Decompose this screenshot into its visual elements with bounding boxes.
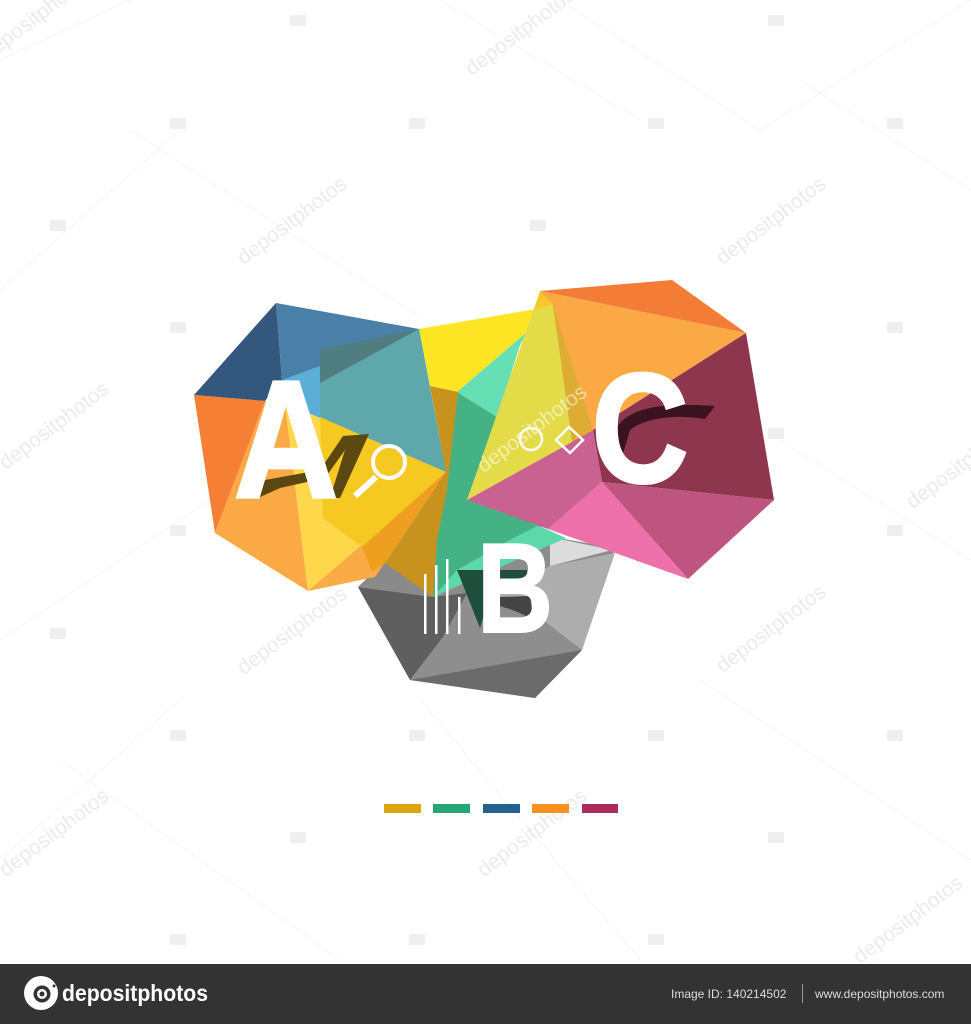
watermark layer: depositphotos [233,582,351,679]
legend colour bars [384,804,618,813]
shape B: green polygon [419,309,566,597]
logo icon: camera [24,976,58,1010]
watermark layer: depositphotos [473,784,591,881]
website: www.depositphotos.com [814,987,944,1001]
shape A: polygon facets [194,303,446,591]
watermark layer: depositphotos [712,172,830,269]
letter shadows [258,405,715,628]
icon: diamond [556,427,583,453]
letter B: B [477,517,553,659]
watermark layer: depositphotos [849,871,967,968]
icon: circle [520,428,542,450]
icon: magnifier [355,446,405,496]
letter A: A [234,347,338,533]
shape C: polygon facets [467,280,774,579]
overlay: teal and amber translucent band [320,329,458,597]
shape B: gray polygon [358,537,615,698]
watermark layer: depositphotos [233,172,351,269]
logo wordmark: depositphotos [62,980,208,1006]
watermark over graphic: depositphotos [473,380,591,477]
footer bar [0,964,971,1024]
image id: Image ID: 140214502 [671,987,787,1001]
icon: bars [424,559,460,634]
watermark layer: depositphotos [712,580,830,677]
letter C: C [592,342,688,516]
